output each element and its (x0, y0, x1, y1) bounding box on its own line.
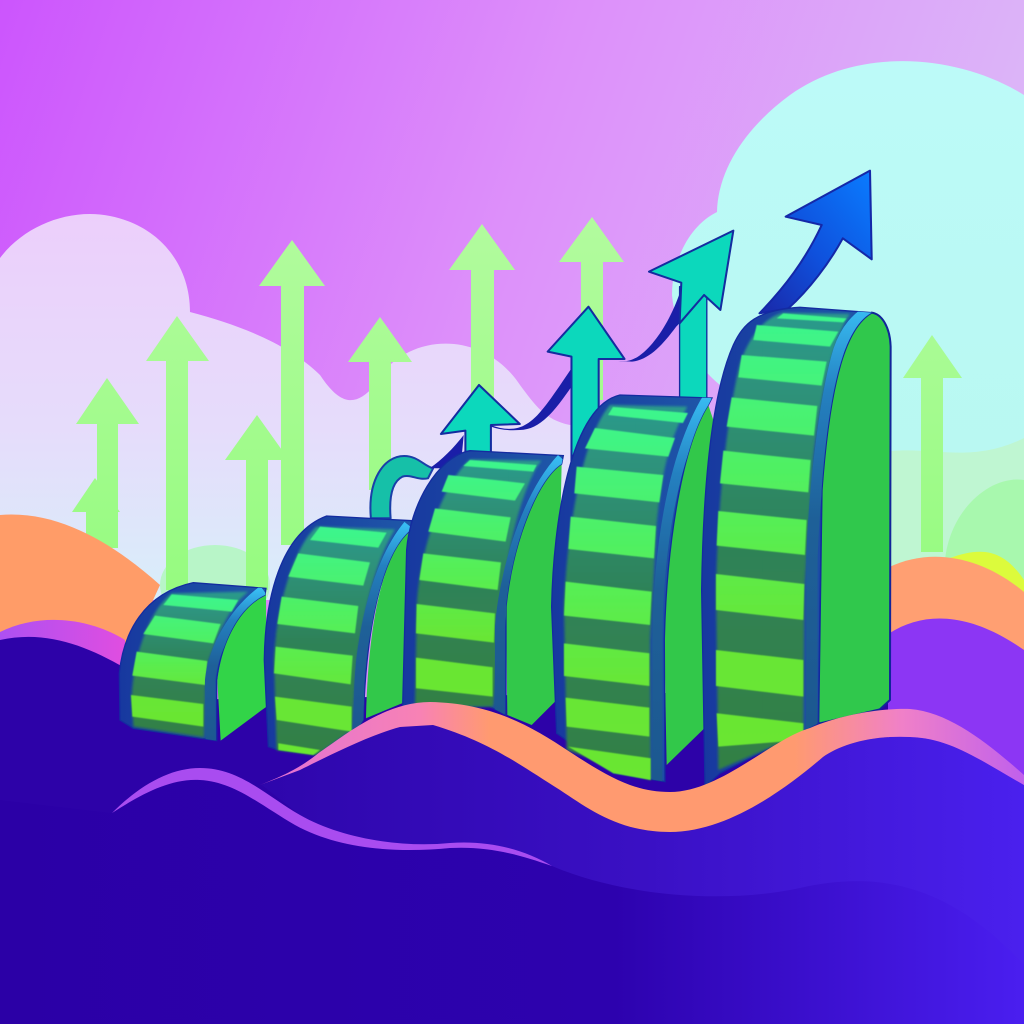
bar 1 light stripes (131, 594, 238, 727)
hill: soft green behind arrows (160, 545, 270, 625)
arrow 8 (559, 217, 624, 400)
bar 2 front frame (264, 516, 412, 755)
bar 3 dark stripes (415, 459, 542, 707)
bar 1 side face (217, 595, 267, 741)
teal curl (370, 456, 433, 518)
front blue wave (262, 725, 1024, 1024)
front orange wave (260, 702, 1024, 832)
dark navy base (0, 637, 1024, 1024)
bar 5 light stripes (716, 313, 847, 747)
ribbon from arrow 2 to arrow 3 (491, 368, 571, 430)
front dark navy wave (0, 780, 1024, 1024)
hill: soft green far right (945, 480, 1024, 600)
arrow 1 (76, 378, 139, 548)
orange wave left (0, 515, 160, 650)
orange wave right (880, 557, 1024, 680)
bar 3 front frame (403, 451, 563, 715)
purple wave left (0, 620, 125, 680)
ribbon from curl to arrow 2 (430, 435, 464, 468)
bar 2 light stripes (274, 527, 387, 755)
teal arrow 2 (441, 385, 520, 477)
bar 2 dark stripes (274, 527, 395, 755)
arrow 3 (146, 316, 209, 590)
bar 5 side face (818, 313, 891, 723)
arrow 4 (225, 415, 289, 590)
bar 1 edge highlight (210, 590, 263, 742)
right yellow accent (950, 552, 1024, 610)
bar 4 side face (664, 405, 713, 765)
cloud: right pale cyan (672, 61, 1024, 600)
arrow 5 (259, 240, 325, 545)
bar 2 edge highlight (359, 525, 408, 730)
arrow 7 (449, 224, 515, 400)
bar 3 (403, 451, 563, 725)
arrow 9 (903, 335, 962, 552)
bar 5 dark stripes (716, 313, 850, 770)
bar 3 edge highlight (500, 458, 562, 717)
bar 4 (552, 395, 713, 783)
blue arrow 5 (760, 171, 872, 313)
bar 3 side face (506, 464, 562, 725)
bar 3 light stripes (416, 460, 537, 697)
hills: soft green right (885, 438, 1024, 600)
background light green arrows (72, 217, 962, 590)
bar 1 (119, 583, 267, 742)
teal arrow 3 shaft and head (548, 307, 625, 470)
bar 1 front frame (119, 583, 266, 741)
growth arrows and curve (370, 171, 872, 518)
bar 5 edge highlight (812, 308, 872, 730)
bar 4 edge highlight (657, 397, 708, 783)
bar 4 dark stripes (564, 405, 687, 780)
bar 2 side face (366, 531, 410, 718)
bar 5 front frame (702, 307, 872, 787)
ribbon from arrow 3 to arrow 4 (618, 292, 704, 362)
arrow 2 (72, 478, 120, 545)
purple wave right (880, 618, 1024, 800)
bar 1 dark stripes (132, 592, 248, 737)
bar 5 (702, 307, 891, 787)
bar 4 front frame (552, 395, 712, 782)
bar 4 light stripes (564, 407, 688, 780)
teal arrow 4 shaft (680, 287, 707, 413)
cloud: left lavender (0, 214, 620, 600)
bar 2 (264, 516, 412, 755)
purple ribbon streak (112, 768, 552, 866)
arrow 6 (348, 317, 412, 490)
teal arrow 4 head (649, 231, 733, 323)
